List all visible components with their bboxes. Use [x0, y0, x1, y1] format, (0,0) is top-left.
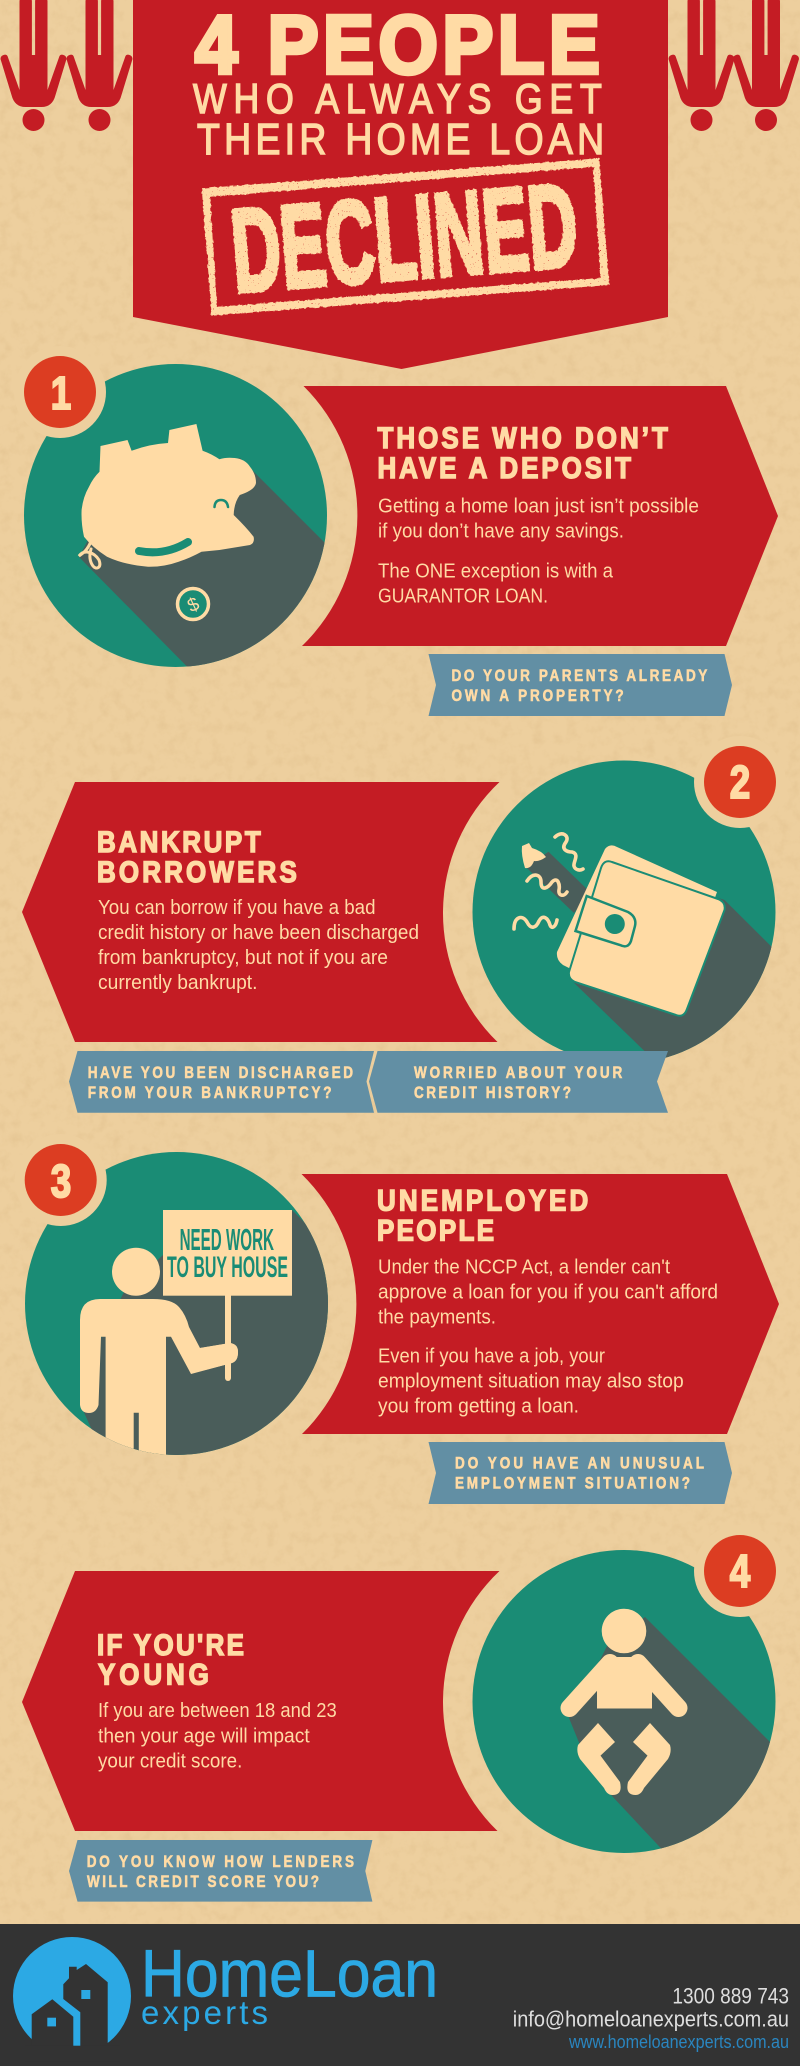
badge 2: 2 — [730, 756, 750, 808]
arrow panel 1 — [302, 386, 778, 646]
question tag 3: DO YOU HAVE AN UNUSUAL — [455, 1454, 704, 1473]
body text 3: the payments. — [378, 1305, 496, 1328]
arrow panel 2 — [22, 782, 500, 1042]
body text 1: GUARANTOR LOAN. — [378, 584, 548, 607]
heading 3 — [377, 1184, 588, 1247]
body text 3: Even if you have a job, your — [378, 1345, 605, 1368]
title: their home loan: THEIR HOME LOAN — [197, 114, 604, 164]
title: 4 people: 4 PEOPLE — [195, 0, 600, 91]
footer — [0, 1924, 800, 2066]
icon: dollar coin: $ — [184, 593, 203, 617]
illustration: job seeker circle — [25, 1152, 328, 1455]
heading 4: YOUNG — [98, 1658, 209, 1691]
question tag 2a: FROM YOUR BANKRUPTCY? — [88, 1084, 332, 1102]
body text 2: credit history or have been discharged — [98, 921, 419, 944]
heading 4 — [97, 1628, 244, 1691]
badge 2 — [694, 736, 786, 828]
icon: squiggles — [514, 834, 583, 929]
heading 2: BANKRUPT — [97, 825, 261, 858]
body text 3: approve a loan for you if you can't afford — [378, 1280, 718, 1303]
body text 1: if you don’t have any savings. — [378, 520, 624, 543]
badge 1: 1 — [51, 367, 71, 419]
heading 4: IF YOU'RE — [97, 1628, 244, 1661]
upside-down figures, right — [668, 0, 799, 131]
icon: hand — [200, 1343, 238, 1370]
body text 2: from bankruptcy, but not if you are — [98, 946, 388, 969]
heading 1 — [378, 421, 668, 484]
body text 4: your credit score. — [98, 1750, 242, 1773]
contact details — [513, 1984, 789, 2052]
logo wordmark: experts — [141, 1994, 268, 2031]
body text 4: If you are between 18 and 23 — [98, 1699, 337, 1722]
icon: person — [80, 1299, 238, 1470]
icon: wallet — [557, 845, 725, 1016]
wallet clasp — [576, 896, 635, 946]
arrow panel 3 — [302, 1174, 779, 1434]
panel 3: unemployed — [15, 1134, 779, 1504]
body text 2: currently bankrupt. — [98, 971, 258, 994]
body text 1: Getting a home loan just isn’t possible — [378, 495, 699, 518]
question tag 2a: HAVE YOU BEEN DISCHARGED — [88, 1064, 353, 1082]
body text 3: Under the NCCP Act, a lender can't — [378, 1255, 670, 1278]
stamp: declined — [202, 158, 609, 318]
body text 1: The ONE exception is with a — [378, 559, 614, 582]
icon: moth — [522, 843, 546, 868]
body text 4: then your age will impact — [98, 1724, 310, 1747]
body text 2: You can borrow if you have a bad — [98, 896, 376, 919]
heading 3: PEOPLE — [377, 1214, 494, 1247]
panel 2: bankrupt — [22, 736, 790, 1113]
illustration: baby circle — [472, 1550, 776, 1853]
illustration: wallet circle — [472, 760, 776, 1058]
panel 1: no deposit — [14, 346, 778, 716]
body text 3 — [378, 1255, 718, 1418]
question tag 1 — [428, 654, 732, 716]
question tag 1: DO YOUR PARENTS ALREADY — [452, 667, 707, 685]
badge 4 — [694, 1525, 786, 1617]
badge 4: 4 — [730, 1545, 750, 1597]
question tag 2b: WORRIED ABOUT YOUR — [414, 1064, 622, 1082]
body text 4 — [98, 1699, 337, 1773]
question tag 4 — [69, 1840, 372, 1902]
icon: sign: TO BUY HOUSE — [167, 1251, 288, 1284]
heading 3: UNEMPLOYED — [377, 1184, 588, 1217]
panel 4: young — [22, 1525, 790, 1902]
logo wordmark: HomeLoan — [141, 1937, 438, 2012]
body text 1 — [378, 495, 699, 607]
body text 3: you from getting a loan. — [378, 1395, 579, 1418]
body text 3: employment situation may also stop — [378, 1370, 684, 1393]
title: who always get: WHO ALWAYS GET — [193, 76, 602, 123]
arrow panel 4 — [22, 1571, 500, 1831]
title banner — [133, 0, 668, 369]
question tag 1: OWN A PROPERTY? — [452, 687, 624, 705]
logo icon: houses in circle — [13, 1937, 131, 2062]
question tag 3 — [428, 1442, 732, 1504]
question tag 2b — [369, 1051, 668, 1113]
question tag 2b: CREDIT HISTORY? — [414, 1084, 571, 1102]
question tag 3: EMPLOYMENT SITUATION? — [455, 1474, 690, 1493]
icon: upside-down piggy — [79, 424, 256, 568]
icon: sign: NEED WORK — [180, 1222, 274, 1257]
question tag 2a — [69, 1051, 374, 1113]
icon: baby — [570, 1609, 678, 1795]
icon: sign pole — [225, 1295, 231, 1378]
body text 2 — [98, 896, 419, 994]
badge 1 — [14, 346, 106, 438]
icon: sign — [163, 1210, 292, 1296]
badge 3 — [15, 1134, 107, 1226]
heading 1: THOSE WHO DON’T — [378, 421, 668, 454]
heading 2: BORROWERS — [97, 855, 297, 888]
badge 3: 3 — [51, 1155, 71, 1207]
question tag 4: DO YOU KNOW HOW LENDERS — [87, 1853, 354, 1871]
illustration: piggy bank circle — [24, 364, 327, 667]
icon: dollar coin — [178, 588, 208, 620]
heading 1: HAVE A DEPOSIT — [378, 451, 631, 484]
heading 2 — [97, 825, 297, 888]
upside-down figures, left — [0, 0, 132, 131]
question tag 4: WILL CREDIT SCORE YOU? — [87, 1873, 319, 1891]
